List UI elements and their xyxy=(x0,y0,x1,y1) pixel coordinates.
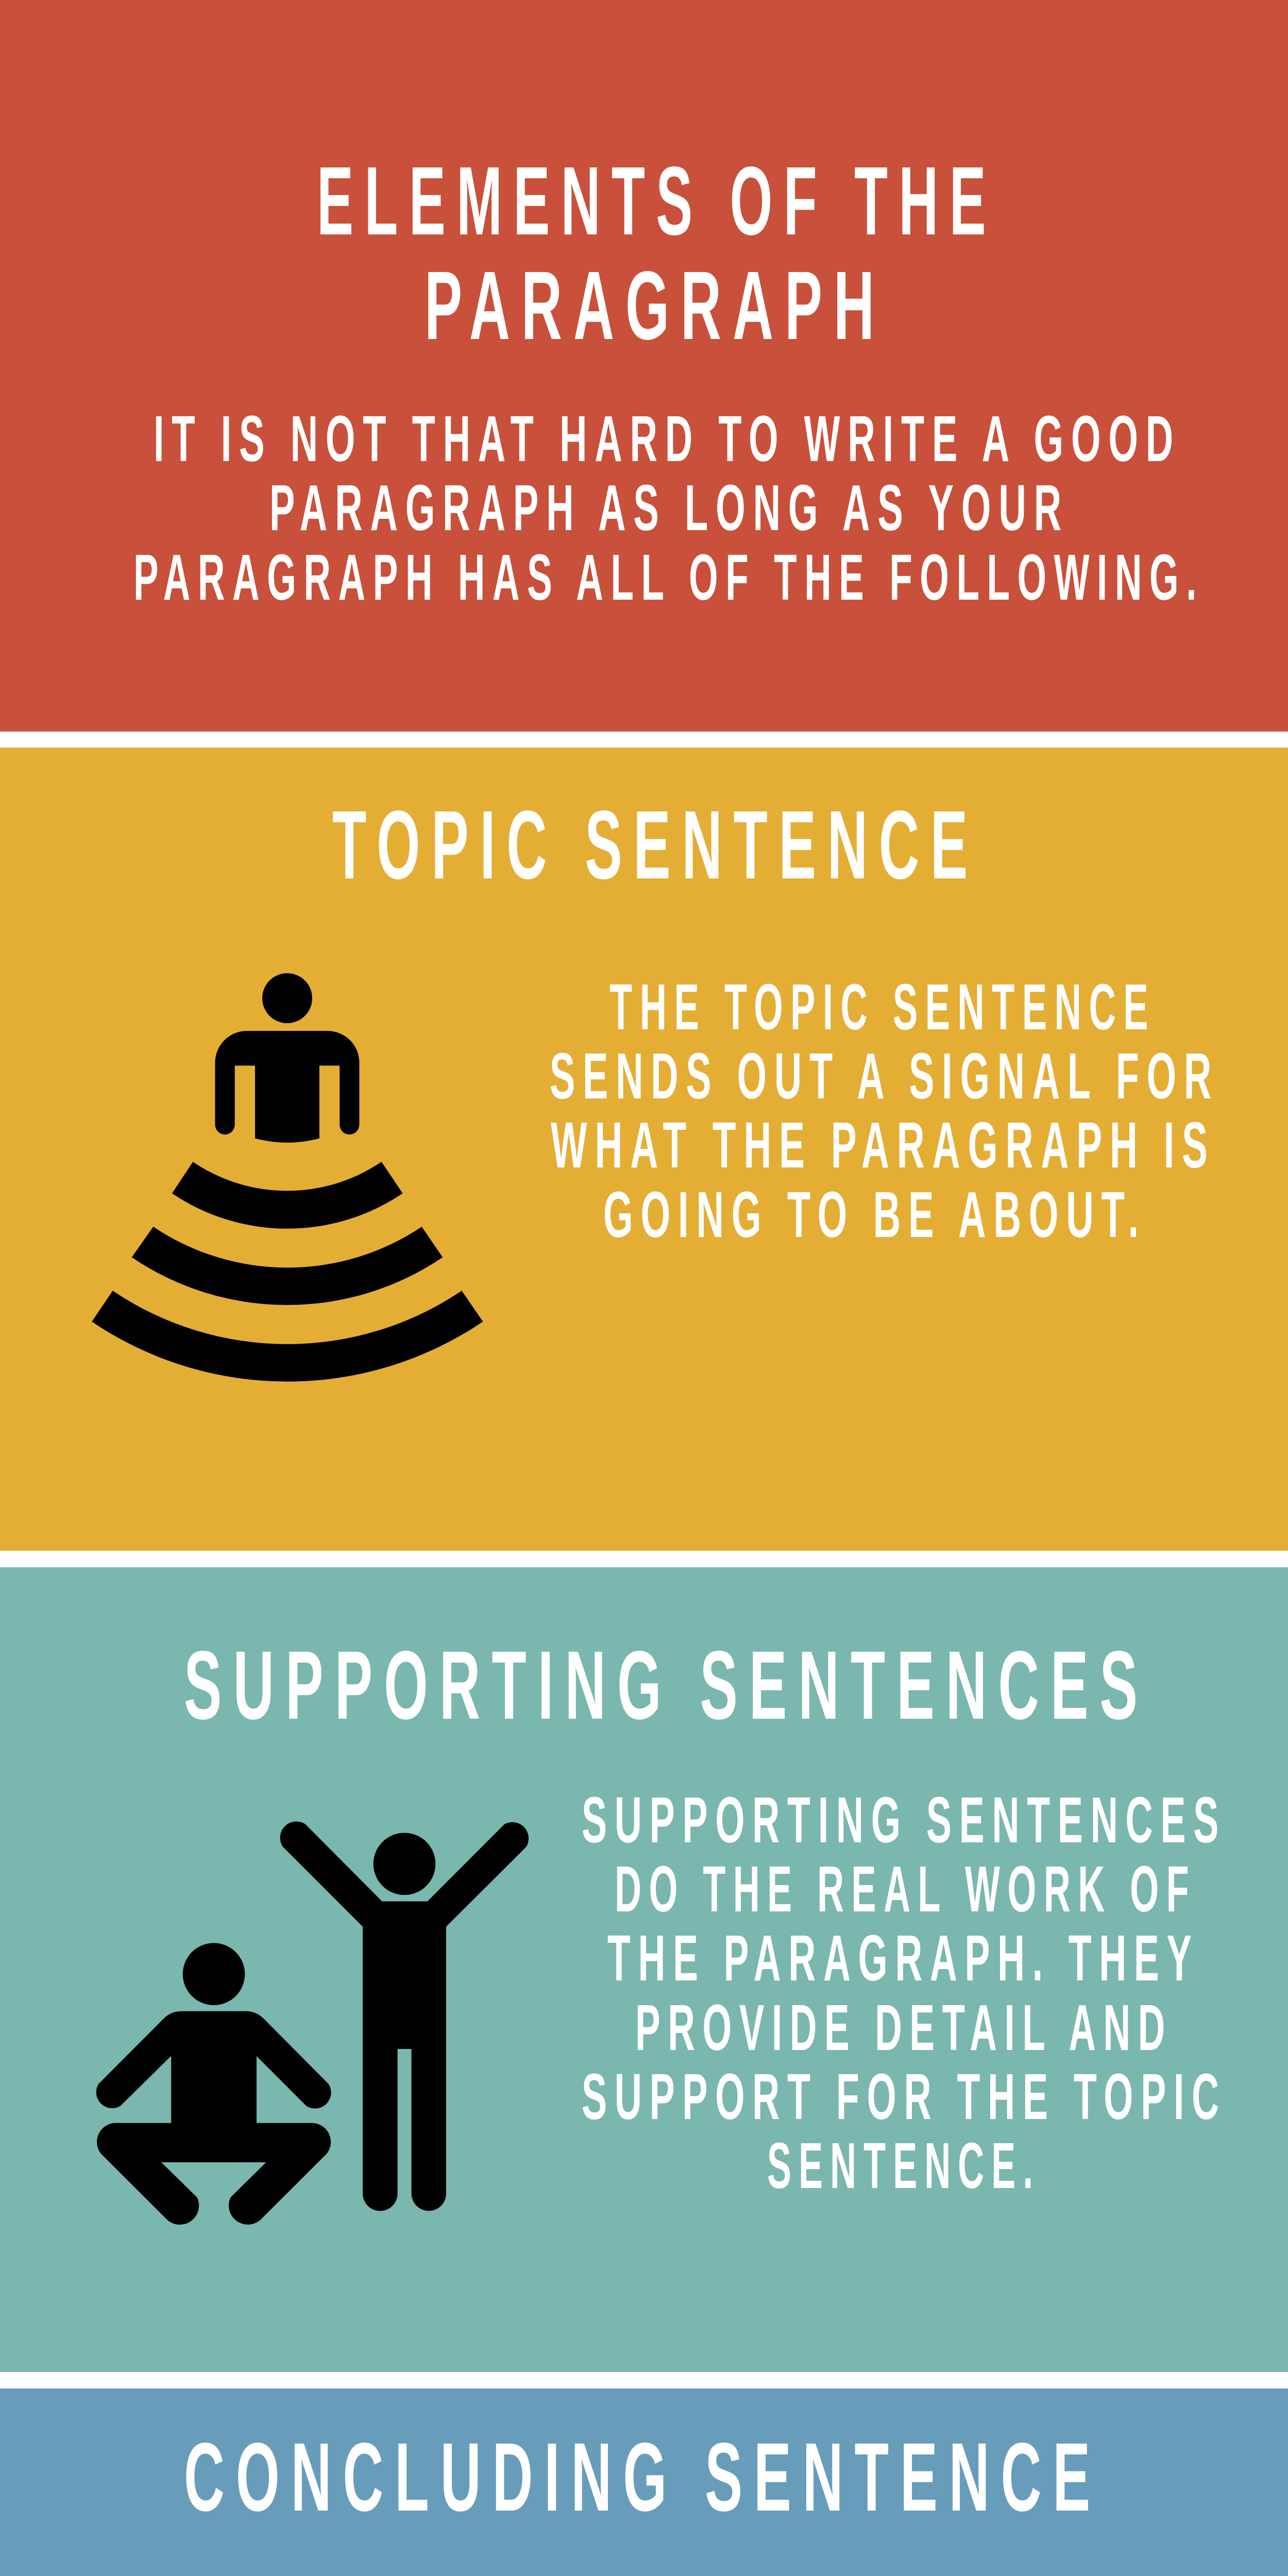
icon: head xyxy=(262,973,312,1023)
icon: body xyxy=(215,1031,359,1143)
title: PARAGRAPH xyxy=(425,251,886,360)
panel: introduction xyxy=(0,0,1288,732)
panel: supporting sentences xyxy=(0,1567,1288,2372)
icon: inner wave xyxy=(172,1162,403,1229)
text block: topic sentence xyxy=(550,971,1219,1251)
icon: squatting person xyxy=(96,1943,331,2225)
panel: topic sentence xyxy=(0,748,1288,1551)
icon: outer wave xyxy=(92,1291,483,1382)
text block: supporting sentences xyxy=(582,1784,1227,2202)
icon: middle wave xyxy=(132,1227,443,1305)
icon: standing person with raised arms xyxy=(280,1821,529,2211)
text block: introduction xyxy=(133,402,1204,614)
text block: supporting sentences: SENTENCE. xyxy=(767,2129,1040,2202)
icon: person sending out signal waves xyxy=(92,973,483,1382)
title xyxy=(317,147,997,360)
